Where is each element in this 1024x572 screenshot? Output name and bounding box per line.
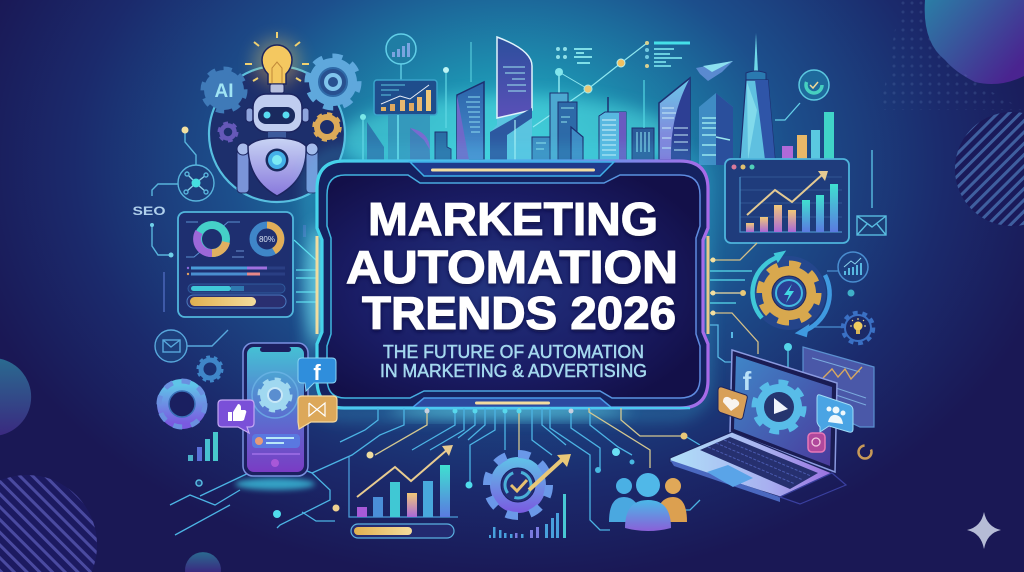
blue gear bbox=[309, 58, 357, 106]
facebook letter: f bbox=[743, 366, 752, 396]
donut badge bbox=[799, 70, 829, 100]
AI gear: AI bbox=[214, 81, 234, 102]
instagram badge bbox=[808, 433, 825, 452]
people bubble bbox=[817, 395, 853, 432]
robot bbox=[237, 94, 318, 196]
skyline chart badge bbox=[374, 34, 437, 115]
trend arrow bbox=[747, 171, 828, 215]
panel inner screen bbox=[327, 175, 700, 398]
check gear bbox=[487, 454, 571, 516]
envelope icon bbox=[857, 150, 886, 235]
check gear arrow bbox=[529, 454, 571, 490]
title panel bbox=[316, 161, 710, 408]
people icon bbox=[609, 473, 687, 531]
bottom growth chart bbox=[349, 445, 458, 538]
growth bars bbox=[357, 465, 450, 517]
chart bars bbox=[746, 184, 838, 232]
tallest tower bbox=[490, 37, 532, 160]
panel top tab bbox=[410, 162, 614, 176]
phone gear bbox=[260, 380, 290, 410]
bottom mini bars bbox=[489, 494, 566, 538]
right circuit lines bbox=[710, 243, 854, 370]
subtitle bbox=[380, 342, 647, 381]
growth arrow bbox=[357, 445, 453, 497]
arrowhead blue bbox=[797, 326, 808, 336]
circuit nodes bbox=[273, 408, 688, 518]
title bbox=[346, 193, 678, 339]
title: TRENDS 2026 bbox=[362, 287, 676, 339]
gold gear bbox=[314, 114, 340, 140]
middle buildings bbox=[532, 80, 654, 160]
gold ring bbox=[858, 446, 872, 458]
facebook bubble bbox=[298, 358, 336, 391]
laptop screen bbox=[730, 350, 837, 472]
panel outer frame bbox=[317, 161, 708, 408]
arrowhead teal bbox=[775, 252, 784, 261]
sparkle icon bbox=[967, 512, 1001, 549]
keyboard bbox=[700, 437, 818, 489]
analytics dashboard bbox=[178, 212, 293, 317]
gauge 80%: 80% bbox=[259, 235, 275, 244]
gear body bbox=[761, 265, 817, 321]
SEO label: SEO bbox=[132, 206, 166, 218]
document panel bbox=[803, 347, 874, 427]
purple gear bbox=[219, 123, 237, 141]
title: AUTOMATION bbox=[346, 241, 678, 293]
large gear bbox=[159, 381, 205, 427]
network icon and connectors bbox=[150, 126, 214, 312]
rotation arrows bbox=[753, 257, 830, 331]
left circuit lines bbox=[294, 225, 316, 302]
sail tower bbox=[457, 82, 484, 160]
idea gear bbox=[843, 313, 873, 343]
right chart panel bbox=[725, 159, 849, 243]
laptop front edge bbox=[670, 460, 780, 502]
dashboard bars bbox=[187, 266, 286, 308]
gold bars bbox=[316, 168, 710, 404]
play gear bbox=[755, 383, 803, 431]
mini signal bars bbox=[188, 432, 218, 461]
facebook bubble: f bbox=[313, 360, 321, 385]
chart badge bbox=[838, 252, 868, 282]
bars behind chart panel bbox=[782, 112, 834, 160]
small gear bbox=[198, 357, 222, 381]
robot illustration bbox=[204, 32, 357, 202]
progress bar bbox=[351, 524, 454, 538]
lightbulb bbox=[245, 32, 309, 93]
screen surface bbox=[734, 356, 832, 466]
glow under phone bbox=[235, 478, 315, 490]
smartphone bbox=[243, 343, 308, 476]
right towers bbox=[659, 33, 800, 165]
laptop bbox=[670, 350, 853, 504]
title: MARKETING bbox=[368, 193, 658, 245]
envelope badge bbox=[155, 330, 228, 362]
message row bbox=[252, 434, 300, 448]
skyline bbox=[360, 33, 834, 165]
subtitle: THE FUTURE OF AUTOMATION bbox=[383, 342, 644, 362]
subtitle: IN MARKETING & ADVERTISING bbox=[380, 361, 647, 381]
laptop base bbox=[670, 432, 832, 497]
central line chart bbox=[533, 41, 690, 127]
like bubble bbox=[218, 400, 254, 433]
mail bubble bbox=[298, 396, 337, 429]
donut chart bbox=[197, 225, 226, 253]
bottom circuit lines bbox=[170, 408, 700, 535]
AI gear bbox=[204, 70, 244, 110]
left towers bbox=[360, 42, 471, 160]
frame glow bbox=[306, 154, 705, 417]
laptop shadow outline bbox=[780, 473, 846, 504]
trackpad bbox=[707, 465, 753, 487]
heart badge bbox=[718, 387, 747, 419]
gold automation gear bbox=[752, 252, 830, 336]
skyline glow bbox=[340, 95, 680, 185]
robot backdrop arc bbox=[209, 66, 345, 202]
panel bottom tab bbox=[412, 398, 612, 408]
